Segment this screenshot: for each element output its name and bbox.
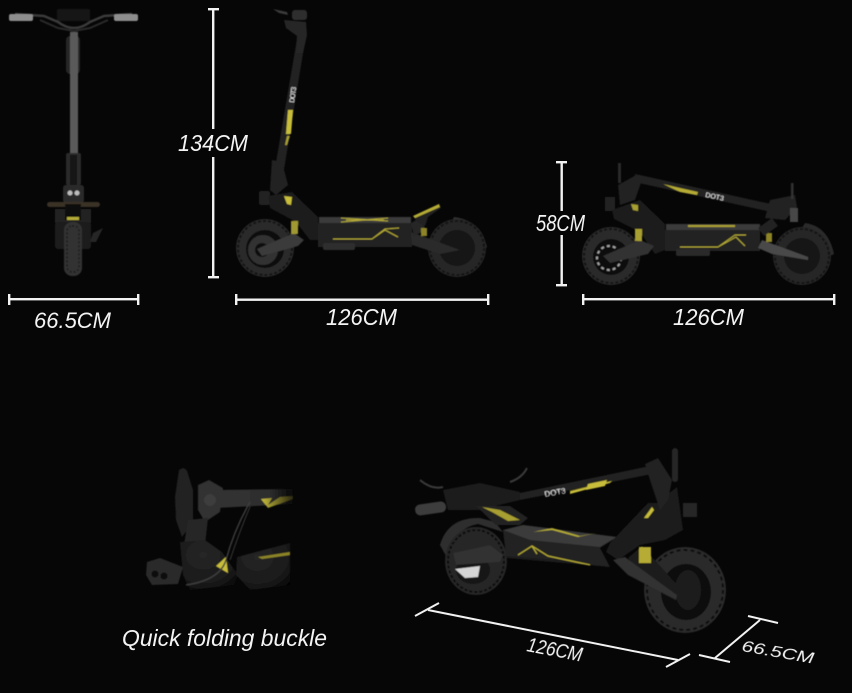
springs <box>635 229 642 241</box>
rear wheel <box>445 527 507 595</box>
scooter: front view <box>9 9 138 276</box>
neck and frame <box>268 192 318 240</box>
deck graphics <box>688 225 735 227</box>
label: 134CM: 134CM <box>178 130 249 156</box>
label: 126CM (perspective): 126CM <box>525 634 584 667</box>
handlebar <box>765 195 797 220</box>
folding joint <box>645 458 672 510</box>
scooter: folded perspective view: DOT3 <box>544 486 567 499</box>
spring <box>291 221 298 234</box>
folded stem <box>520 466 652 500</box>
folded stem <box>634 174 780 213</box>
fork and swingarm <box>603 240 654 263</box>
scooter: folded side view <box>582 163 834 285</box>
spring <box>639 547 651 563</box>
label: 126CM: 126CM <box>326 304 398 330</box>
dimension: folded height <box>556 161 567 286</box>
front wheel <box>644 547 726 633</box>
stem label: DOT3 <box>289 86 298 103</box>
neck and frame <box>612 200 665 254</box>
deck graphics <box>341 218 388 222</box>
dimension: front view width <box>8 294 139 305</box>
dimension: perspective length <box>415 603 690 667</box>
neck <box>606 487 683 560</box>
dimension: perspective width <box>699 616 778 662</box>
label: 58CM: 58CM <box>536 210 586 236</box>
scooter: folded perspective view <box>414 448 726 633</box>
rear fender <box>452 217 487 249</box>
folding joint <box>270 160 288 195</box>
handlebar <box>443 483 520 510</box>
dimension: height <box>208 8 219 278</box>
stem <box>272 33 306 188</box>
deck <box>666 224 760 230</box>
foot pedal <box>413 204 441 226</box>
folding joint <box>618 163 621 183</box>
front wheel <box>582 227 640 285</box>
deck <box>319 217 411 223</box>
fender bracket with yellow graphic <box>476 506 528 525</box>
dimension: side view length <box>235 294 489 305</box>
rear wheel <box>773 227 831 285</box>
swingarm <box>453 545 503 565</box>
label: 66.5CM (perspective): 66.5CM <box>740 638 816 668</box>
photo: folding buckle detail <box>146 468 293 590</box>
scooter: folded side view: DOT3 <box>705 192 724 203</box>
label: 66.5CM: 66.5CM <box>34 308 112 333</box>
dimension: folded length <box>582 294 835 305</box>
scooter: side view <box>236 9 487 277</box>
rear fender <box>440 518 503 556</box>
rear wheel <box>428 219 486 277</box>
fork and swingarm <box>257 233 304 256</box>
front wheel <box>236 219 294 277</box>
deck <box>503 530 610 567</box>
rear fender <box>802 223 834 256</box>
caption: Quick folding buckle <box>122 625 327 651</box>
label: 126CM: 126CM <box>673 304 745 330</box>
deck graphics <box>533 528 596 537</box>
